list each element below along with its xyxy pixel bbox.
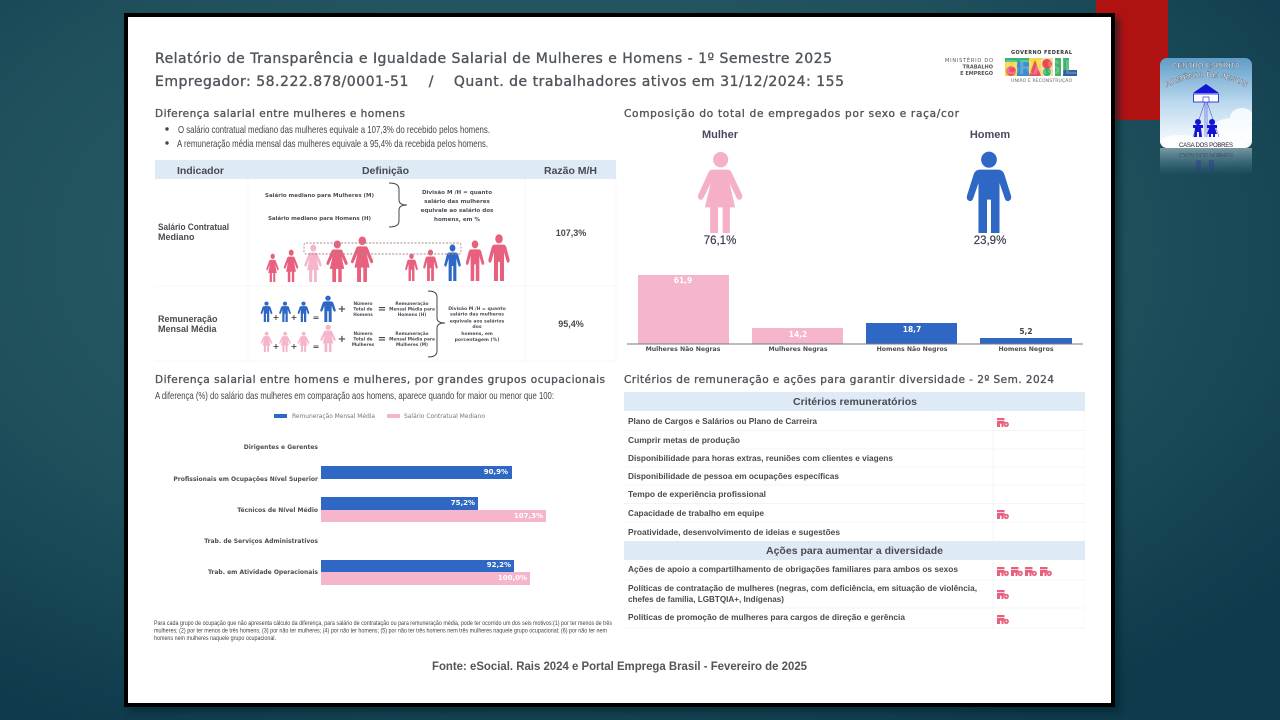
ministry name (945, 56, 993, 77)
criteria rows: Proatividade, desenvolvimento de ideias e sugestões (628, 527, 840, 537)
source line: Fonte: eSocial. Rais 2024 e Portal Emprega Brasil - Fevereiro de 2025 (432, 659, 807, 673)
definition text: equivale aos salários (450, 318, 504, 324)
bracket (389, 183, 407, 227)
criteria rows: Plano de Cargos e Salários ou Plano de Carreira (628, 416, 817, 426)
men equation: Homens (H) (398, 312, 426, 318)
logo reflection: CASA DOS POBRES (1179, 151, 1233, 157)
footnote: mulheres; (2) por ter menos de três homens; (3) por não ter mulheres; (4) por não ter homens; (5) por não ter três homens nem três mulheres naquele grupo ocupacional; (6) por não ter nem (154, 628, 607, 634)
men equation: Número (353, 300, 373, 307)
man share: 23,9% (974, 235, 1006, 247)
action rows (628, 564, 977, 622)
chart legend: Remuneração Mensal Média (292, 413, 375, 420)
women equation: = (313, 342, 319, 351)
median highlight box (304, 243, 461, 254)
woman share (698, 129, 742, 247)
ministry name: TRABALHO (963, 64, 993, 70)
category labels: Trab. em Atividade Operacionais (208, 569, 318, 576)
men equation: Homens (353, 312, 373, 318)
men equation: Total de (353, 306, 373, 312)
chart legend (274, 413, 485, 420)
man share: Homem (970, 129, 1010, 141)
definition text: salário das mulheres (424, 198, 491, 205)
definition text: homens, em (461, 331, 493, 337)
sheet shadow (128, 18, 1120, 712)
icon: house (1193, 84, 1219, 137)
category labels (173, 444, 318, 576)
women equation: Remuneração (395, 331, 429, 337)
median labels: Salário mediano para Homens (H) (268, 215, 371, 222)
ministry name: E EMPREGO (960, 71, 993, 77)
women equation: Mensal Média para (389, 336, 435, 342)
bar chart: sex and race: 14,2 (789, 330, 807, 339)
subtitle: A diferença (%) do salário das mulheres em comparação aos homens, aparece quando for maior ou menor que 100: (155, 390, 554, 402)
footnote: Para cada grupo de ocupação que não apresenta cálculo da diferença, para salário de contratação ou para remuneração média, pode ter ocorrido um dos seis motivos:(1) por ter menos de três (154, 620, 613, 627)
table header: criteria: Critérios remuneratórios (793, 396, 917, 408)
criteria rows: Disponibilidade para horas extras, reuniões com clientes e viagens (628, 453, 893, 463)
bracket (428, 291, 445, 357)
summary bullets: A remuneração média mensal das mulheres equivale a 95,4% da recebida pelos homens. (177, 138, 488, 150)
women equation: + (273, 342, 279, 351)
definition text: salário das mulheres (450, 310, 504, 318)
row label: Mediano (158, 232, 195, 242)
logo caption: CASA DOS POBRES (1179, 143, 1233, 149)
ratio value: 107,3% (556, 228, 586, 238)
criteria rows: Tempo de experiência profissional (628, 489, 766, 499)
category labels: Técnicos de Nível Médio (237, 507, 318, 514)
bars (321, 466, 546, 585)
table grid (624, 411, 1085, 628)
ratio value: 95,4% (558, 319, 584, 329)
men equation: = (313, 313, 319, 322)
criteria rows: Capacidade de trabalho em equipe (628, 508, 764, 518)
median figures (266, 234, 510, 282)
bar chart: sex and race: Homens Negros (998, 346, 1054, 353)
women equation: Número (353, 330, 373, 337)
bar values: 90,9% (484, 468, 508, 476)
chart legend: Salário Contratual Mediano (404, 413, 485, 420)
category labels: Profissionais em Ocupações Nível Superior (173, 476, 318, 483)
bar chart: sex and race: Mulheres Negras (768, 346, 828, 353)
row: remuneração mensal média (158, 291, 584, 357)
table header: Indicador (177, 165, 224, 177)
governo federal label: GOVERNO FEDERAL (1011, 50, 1073, 56)
report sheet (126, 15, 1113, 705)
bar chart: sex and race (627, 275, 1083, 353)
bar chart: sex and race: 5,2 (1019, 327, 1033, 336)
category labels: Dirigentes e Gerentes (244, 444, 318, 451)
brasil wordmark: BRASIL (1005, 57, 1077, 79)
report content (154, 50, 1085, 673)
clouds (1160, 108, 1252, 144)
bar chart: sex and race: 61,9 (674, 276, 692, 285)
bar values: 75,2% (451, 499, 475, 507)
bar values (451, 468, 543, 582)
row label (158, 314, 218, 334)
panel: workforce composition (624, 108, 1083, 353)
government logo (945, 50, 1077, 84)
definition text: Divisão M /H = quanto (448, 306, 506, 312)
panel: occupational groups (154, 374, 613, 642)
adoption icons (997, 418, 1052, 624)
women equation: Mulheres (352, 342, 375, 348)
men equation: + (338, 304, 346, 315)
heading: composition: Composição do total de empregados por sexo e raça/cor (624, 108, 960, 120)
logo reflection (1160, 148, 1252, 175)
red accent block (1096, 0, 1168, 120)
men equation: Mensal Média para (389, 306, 435, 312)
definition text (448, 306, 506, 343)
bar chart: sex and race: Mulheres Não Negras (646, 346, 721, 353)
table header: criteria (624, 392, 1085, 411)
heading: criteria: Critérios de remuneração e ações para garantir diversidade - 2º Sem. 2024 (624, 374, 1054, 386)
heading: occupational groups: Diferença salarial entre homens e mulheres, por grandes grupos ocupacionais (155, 374, 605, 386)
bar values: 107,3% (514, 512, 543, 520)
women equation: + (291, 342, 297, 351)
women equation: + (338, 334, 346, 345)
logo tile (1160, 58, 1252, 148)
definition text: porcentagem (%) (455, 337, 499, 343)
panel: criteria and actions (624, 374, 1085, 628)
men equation: + (273, 313, 279, 322)
definition text: homens, em % (434, 217, 480, 223)
row label: Remuneração (158, 314, 218, 324)
indicator table (155, 160, 616, 361)
action rows: Ações de apoio a compartilhamento de obrigações familiares para ambos os sexos (628, 564, 958, 574)
união e reconstrução label: UNIÃO E RECONSTRUÇÃO (1011, 77, 1072, 84)
row: salário contratual mediano (158, 183, 586, 282)
criteria rows: Cumprir metas de produção (628, 435, 740, 445)
definition text: equivale ao salário dos (421, 207, 494, 214)
criteria rows (628, 416, 893, 537)
bar chart: sex and race: 18,7 (903, 325, 921, 334)
women equation (261, 325, 435, 352)
women equation: Total de (353, 336, 373, 342)
row label (158, 222, 229, 242)
row label: Mensal Média (158, 324, 218, 334)
table header: actions (624, 541, 1085, 560)
table header: actions: Ações para aumentar a diversidade (766, 545, 943, 557)
men equation (261, 296, 435, 322)
action rows: chefes de família, LGBTQIA+, Indígenas) (628, 594, 784, 604)
median labels: Salário mediano para Mulheres (M) (265, 192, 374, 199)
footnote (154, 620, 613, 642)
heading: salary difference: Diferença salarial entre mulheres e homens (155, 108, 405, 120)
report title (155, 51, 844, 90)
icon: women row (266, 236, 373, 282)
action rows: Políticas de promoção de mulheres para cargos de direção e gerência (628, 612, 905, 622)
bar chart: sex and race: Homens Não Negros (877, 346, 948, 353)
logo curved name (1166, 72, 1248, 88)
definition text (421, 190, 494, 223)
men equation: + (291, 313, 297, 322)
action rows: Políticas de contratação de mulheres (negras, com deficiência, em situação de violência, (628, 583, 977, 593)
report title: Empregador: 58.222.878/0001-51 / Quant. de trabalhadores ativos em 31/12/2024: 155 (155, 74, 844, 90)
panel: salary difference (155, 108, 616, 361)
criteria rows: Disponibilidade de pessoa em ocupações específicas (628, 471, 839, 481)
summary bullets: O salário contratual mediano das mulheres equivale a 107,3% do recebido pelos homens. (178, 124, 490, 136)
organisation logo (1160, 58, 1252, 172)
row label: Salário Contratual (158, 222, 229, 232)
definition text: dos (472, 324, 482, 330)
man share (967, 129, 1011, 247)
definition text: Divisão M /H = quanto (422, 190, 492, 196)
bar values: 100,0% (498, 574, 527, 582)
women equation: = (378, 334, 386, 345)
footnote: homens nem mulheres naquele grupo ocupacional. (154, 635, 276, 642)
woman share: Mulher (702, 129, 739, 141)
report title: Relatório de Transparência e Igualdade Salarial de Mulheres e Homens - 1º Semestre 2025 (155, 51, 832, 67)
men equation: = (378, 304, 386, 315)
bar values: 92,2% (487, 561, 511, 569)
summary bullets (165, 124, 490, 150)
table header: Definição (362, 165, 409, 177)
median labels (265, 192, 374, 222)
table header: Razão M/H (544, 165, 597, 177)
logo heading: CENTRO ESPÍRITA (1172, 61, 1241, 70)
icon: men row (405, 234, 510, 281)
bar chart: occupational groups (173, 444, 546, 585)
category labels: Trab. de Serviços Administrativos (204, 538, 318, 545)
icon: two children (1193, 119, 1217, 137)
ministry name: MINISTÉRIO DO (945, 56, 993, 64)
table header (155, 160, 616, 179)
women equation: Mulheres (M) (396, 342, 428, 348)
men equation: Remuneração (395, 301, 429, 307)
woman share: 76,1% (704, 235, 736, 247)
